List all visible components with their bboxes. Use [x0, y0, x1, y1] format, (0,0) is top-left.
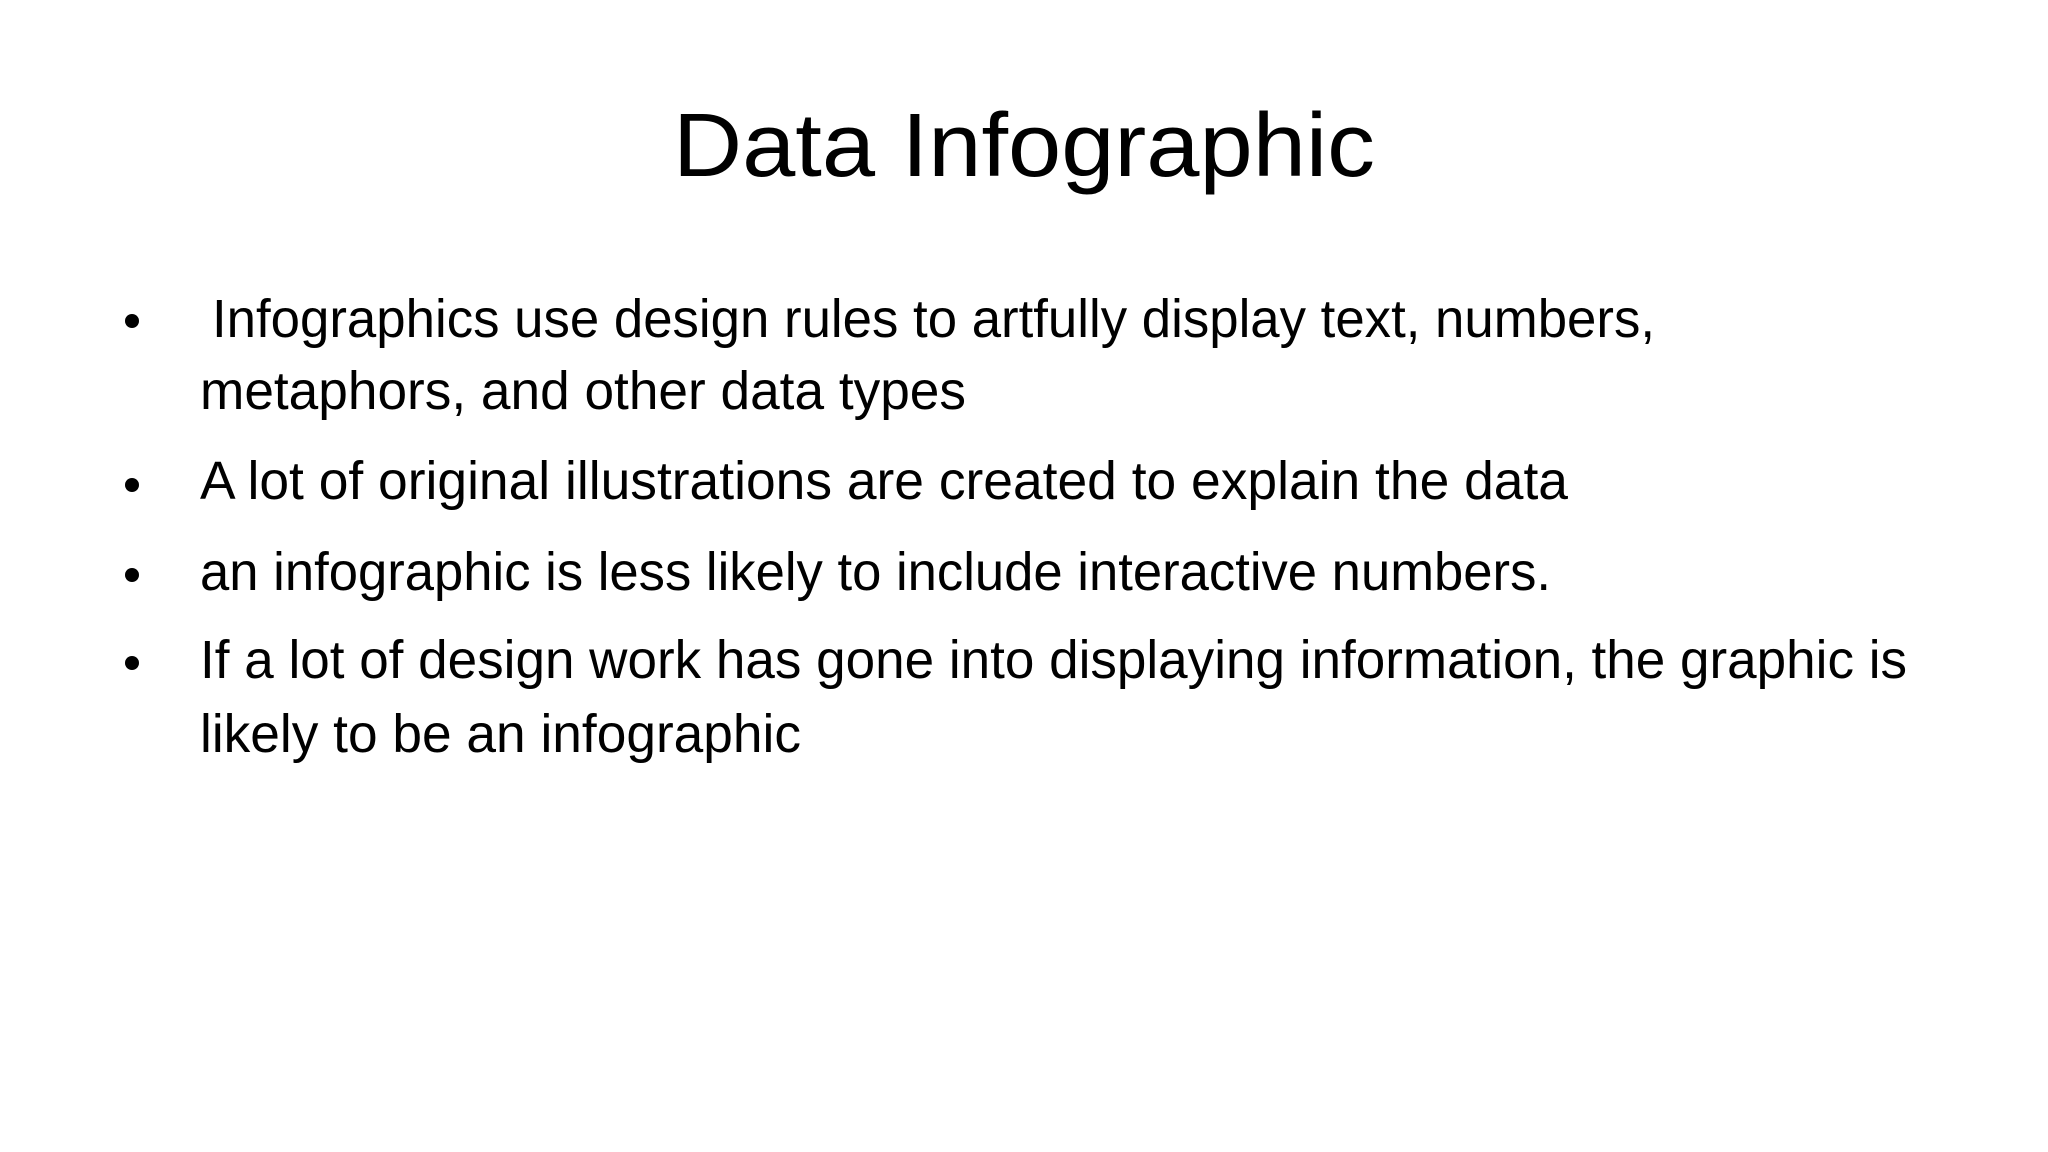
bullet 1 [125, 289, 1655, 421]
bullet 1: metaphors, and other data types [200, 361, 966, 421]
bullet list [125, 289, 1907, 764]
bullet 1: Infographics use design rules to artfully display text, numbers, [212, 289, 1655, 349]
title: Data Infographic [673, 96, 1375, 196]
bullet 4: likely to be an infographic [200, 704, 801, 764]
bullet 3: an infographic is less likely to include interactive numbers. [200, 542, 1551, 602]
bullet 4 [125, 630, 1907, 764]
bullet 2: A lot of original illustrations are created to explain the data [200, 451, 1569, 511]
bullet 4: If a lot of design work has gone into displaying information, the graphic is [200, 630, 1907, 690]
